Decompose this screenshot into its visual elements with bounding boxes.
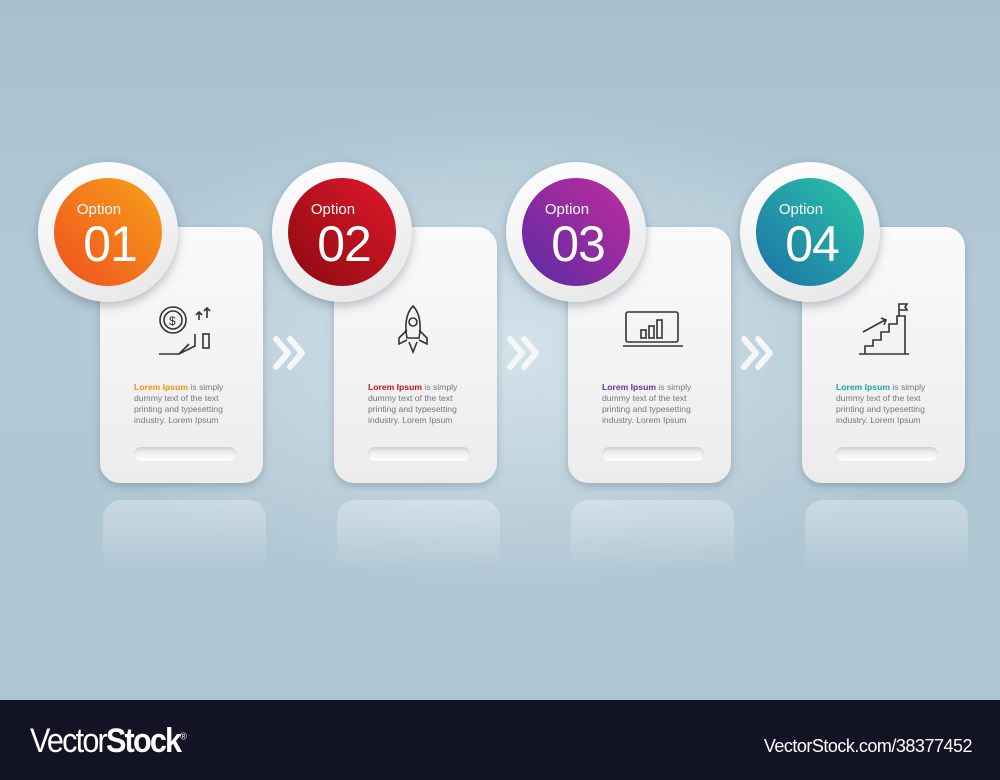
footer url: VectorStock.com/38377452 [764,736,972,756]
badge 01 [38,162,178,302]
arrow 1 [273,336,305,370]
badge 02: Option [311,201,355,218]
icon: growth stairs [859,303,909,355]
reflection 4 [805,500,968,570]
badge 02 [272,162,412,302]
badge 01: Option [77,201,121,218]
footer [0,700,1000,780]
badge 01: 01 [83,216,137,272]
card 1 [100,227,263,483]
badge 04: Option [779,201,823,218]
badge 02: 02 [317,216,371,272]
text block: Lorem Ipsum is simply dummy text of the text printing and typesetting industry. Lorem Ipsum [602,382,691,425]
icon: money hand: $ [169,314,176,328]
text block: Lorem Ipsum is simply dummy text of the text printing and typesetting industry. Lorem Ipsum [368,382,457,425]
reflection 2 [337,500,500,570]
badge 04 [740,162,880,302]
icon: money hand [159,306,210,355]
text block: Lorem Ipsum is simply dummy text of the text printing and typesetting industry. Lorem Ipsum [836,382,925,425]
reflection 1 [103,500,266,570]
card 4 [802,227,965,483]
badge 03 [506,162,646,302]
card 3 [568,227,731,483]
arrow 2 [507,336,539,370]
card 2 [334,227,497,483]
text block: Lorem Ipsum is simply dummy text of the text printing and typesetting industry. Lorem Ipsum [134,382,223,425]
icon: rocket [398,305,428,354]
arrow 3 [741,336,773,370]
footer logo: VectorStock® [30,722,185,760]
badge 03: Option [545,201,589,218]
icon: laptop chart [623,311,683,347]
badge 03: 03 [551,216,605,272]
badge 04: 04 [785,216,839,272]
reflection 3 [571,500,734,570]
